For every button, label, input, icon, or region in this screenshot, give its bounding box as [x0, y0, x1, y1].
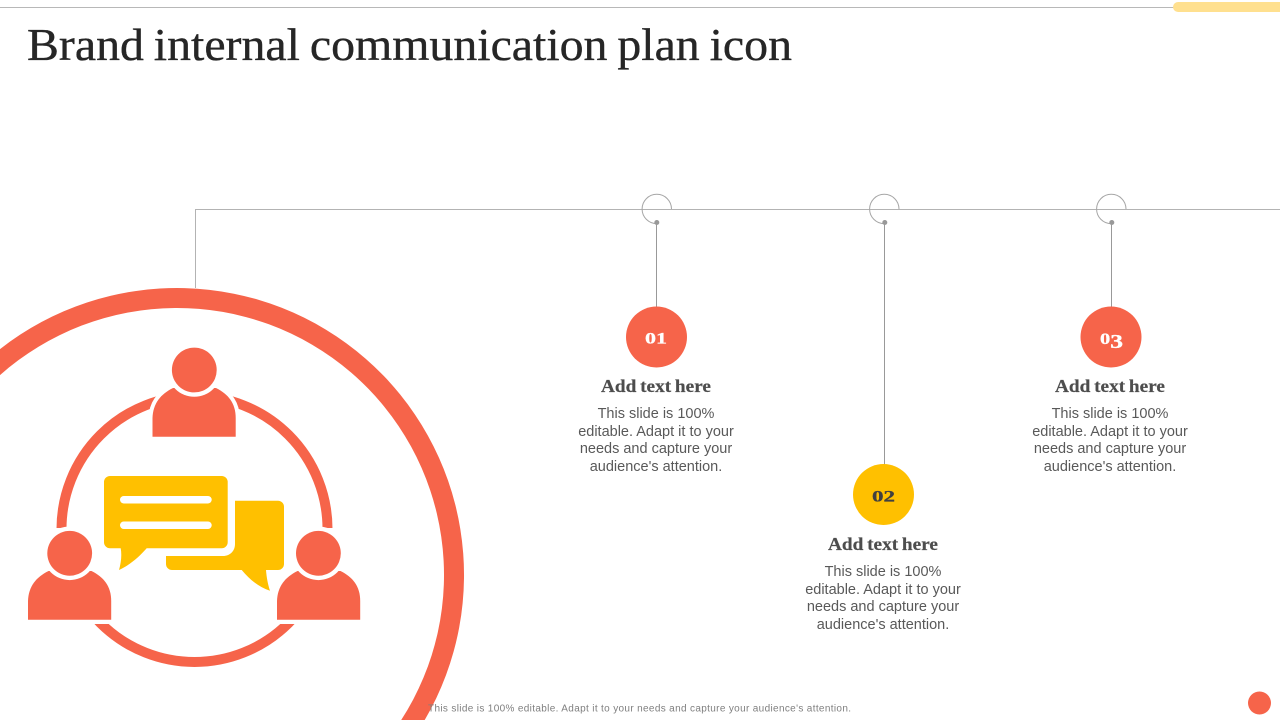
large ring	[0, 288, 464, 720]
icon: team communication	[28, 343, 360, 662]
connector 01	[642, 194, 672, 308]
number badge 03: 3	[1110, 331, 1123, 353]
number badge 02	[853, 464, 914, 525]
body text 01: audience's attention.	[590, 459, 722, 475]
body text 03: editable. Adapt it to your	[1032, 424, 1188, 440]
footer note: This slide is 100% editable. Adapt it to your needs and capture your audience's attention.	[428, 704, 851, 714]
item 02	[805, 194, 961, 633]
item 01	[578, 194, 734, 475]
body text 03: This slide is 100%	[1052, 406, 1169, 422]
icon: top person	[152, 343, 236, 437]
icon: large speech bubble	[104, 476, 228, 570]
connector 02	[870, 194, 899, 465]
body text 02: needs and capture your	[807, 599, 959, 615]
body text 03: needs and capture your	[1034, 441, 1186, 457]
body text 02: editable. Adapt it to your	[805, 582, 961, 598]
icon: right person	[277, 526, 360, 620]
heading 03: Add text here	[1055, 376, 1165, 396]
heading 02: Add text here	[828, 534, 938, 554]
icon: small speech bubble	[166, 501, 284, 591]
page marker dot	[1248, 692, 1271, 714]
timeline connector	[196, 210, 1280, 288]
body text 01: needs and capture your	[580, 441, 732, 457]
icon: left person	[28, 526, 111, 620]
top accent bar	[1173, 2, 1280, 12]
heading 01: Add text here	[601, 376, 711, 396]
number badge 03: 0	[1100, 331, 1110, 348]
body text 03: audience's attention.	[1044, 459, 1176, 475]
body text 02: audience's attention.	[817, 617, 949, 633]
body text 01: This slide is 100%	[598, 406, 715, 422]
title: Brand internal communication plan icon	[27, 19, 792, 70]
number badge 02: 02	[872, 488, 895, 506]
number badge 01	[626, 306, 687, 368]
item 03	[1032, 194, 1188, 475]
number badge 03	[1080, 306, 1142, 368]
body text 02: This slide is 100%	[825, 564, 942, 580]
connector 03	[1097, 194, 1126, 308]
number badge 01: 01	[645, 330, 667, 348]
body text 01: editable. Adapt it to your	[578, 424, 734, 440]
icon: connecting ring	[40, 396, 346, 662]
